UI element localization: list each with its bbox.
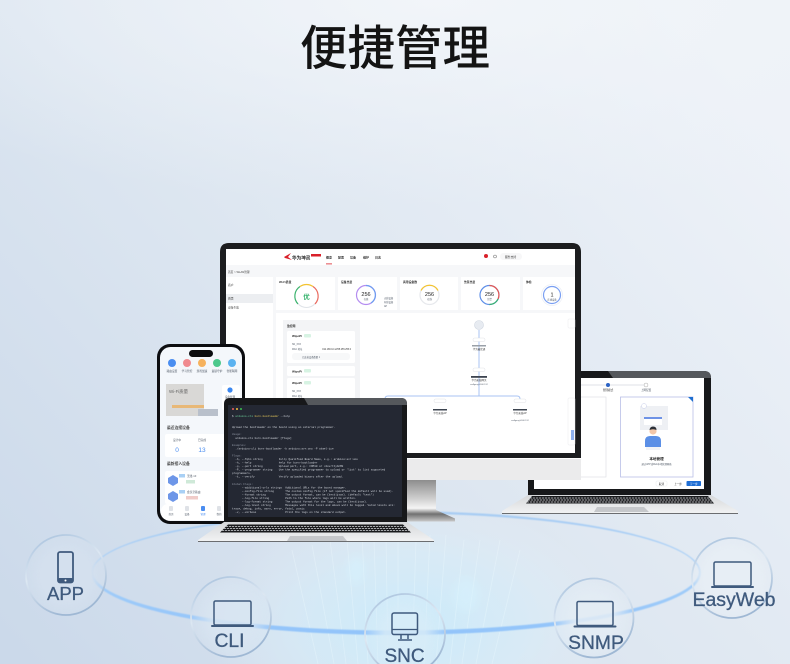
sidebar: 首页 xyxy=(228,296,234,300)
phone app icons: 游戏加速 xyxy=(197,369,208,373)
phone app icons: 学习管控 xyxy=(182,369,193,373)
phone tab bar: 我的 xyxy=(216,512,222,516)
screen xyxy=(534,378,704,489)
status card: access devices: 256 xyxy=(361,292,371,298)
device list xyxy=(283,320,360,453)
icon: smartphone xyxy=(58,552,73,583)
device list: 监控网 xyxy=(287,324,296,328)
status card: access devices: AP xyxy=(384,305,388,308)
phone device rows: 会议室路由 xyxy=(187,490,201,494)
selected option card: 通过APP或Web本地管理网络 xyxy=(642,462,672,466)
device card 3: SN_XXX xyxy=(292,391,302,393)
orbit ring xyxy=(91,511,701,635)
terminal screen: -P, --programmer string Use the specified programmer to upload or 'list' to list supported xyxy=(232,468,386,472)
phone stats card: 0 xyxy=(175,447,179,454)
lid xyxy=(528,371,711,495)
status card: access devices: 无线设备 xyxy=(384,296,394,300)
header bar: 配置 xyxy=(338,254,344,260)
base xyxy=(198,522,434,541)
phone tab bar xyxy=(161,504,241,520)
screen xyxy=(226,249,575,453)
status card: terminals: 商用设备数 xyxy=(403,280,417,284)
node: SNMP: SNMP xyxy=(568,633,624,654)
stepper: 管理模式 xyxy=(603,388,614,392)
status card: gateways: 告警 xyxy=(487,297,492,301)
phone device rows xyxy=(165,471,225,504)
status card: terminals: 在线 xyxy=(427,297,432,301)
left option card xyxy=(560,397,606,477)
terminal screen: -b, --fqbn string Fully Qualified Board Name, e.g.: arduino:avr:uno xyxy=(232,457,358,461)
terminal screen: Global Flags: xyxy=(232,482,253,486)
phone stats card: 已完成 xyxy=(198,438,206,442)
terminal screen: -p, --port string Upload port, e.g.: COM10 or /dev/ttyACM0 xyxy=(232,464,344,468)
selected option card: 本地管理 xyxy=(649,456,664,461)
terminal screen: arduino-cli burn-bootloader [flags] xyxy=(232,436,292,440)
person illustration xyxy=(645,426,661,450)
footer buttons: 取消 xyxy=(659,482,664,486)
node: EasyWeb: EasyWeb xyxy=(692,589,776,611)
terminal screen: --config-file string The custom config file (if not specified the default will be used). xyxy=(232,489,393,493)
node: SNMP xyxy=(554,578,634,658)
node: CLI xyxy=(191,577,271,657)
header bar: 概览 xyxy=(326,254,332,260)
phone tab bar: 设备 xyxy=(184,512,190,516)
breadcrumb: 首页 > WLAN管理 xyxy=(228,270,250,274)
terminal screen: -t, --verify Verify uploaded binary after the upload. xyxy=(232,474,343,478)
terminal screen: Flags: xyxy=(232,454,242,458)
terminal screen: Upload the bootloader on the board using an external programmer. xyxy=(232,425,335,429)
topology diagram: wolfgang14:80 192 xyxy=(470,384,489,386)
icon: desktop monitor xyxy=(392,613,418,640)
terminal screen: -h, --help help for burn-bootloader xyxy=(232,460,318,464)
icon: laptop xyxy=(711,562,754,588)
status card: gateways: 告警总量 xyxy=(464,280,475,284)
phone app icons: 路由设置 xyxy=(167,369,178,373)
status card: sites xyxy=(523,277,575,310)
topology diagram: 华为最优通 xyxy=(473,347,486,351)
terminal screen xyxy=(228,405,402,517)
topology diagram: wolfgang14:80 192 xyxy=(511,420,530,422)
phone stats card: 13 xyxy=(198,447,206,454)
light glow with rays xyxy=(200,495,620,664)
node: APP xyxy=(26,535,106,615)
phone device rows: 无线-1F xyxy=(187,474,197,478)
device card 1: WipoPi xyxy=(292,334,302,338)
header bar: 日志 xyxy=(375,254,381,260)
base xyxy=(502,495,738,513)
left laptop xyxy=(198,398,434,542)
main content area xyxy=(276,313,575,453)
header bar: 维护 xyxy=(363,254,369,260)
status card: access devices: 设备总量 xyxy=(341,280,352,284)
node: SNC xyxy=(365,594,445,664)
phone app icons: 童锁守护 xyxy=(212,369,223,373)
terminal screen: --log-file string Path to the file where logs will be written. xyxy=(232,496,356,500)
status card: access devices: 在线 xyxy=(364,297,369,301)
status card: gateways: 256 xyxy=(485,292,494,298)
terminal screen: $ arduino-cli burn-bootloader --help xyxy=(232,414,290,418)
device card 1: SN_XXX xyxy=(292,344,302,346)
header bar: 设备 xyxy=(350,254,356,260)
sidebar xyxy=(226,277,273,453)
topology diagram: 华为无线网关 xyxy=(471,378,487,382)
phone tab bar: 首页 xyxy=(168,512,174,516)
selected option card xyxy=(620,397,693,477)
footer buttons: 上一步 xyxy=(674,482,682,486)
icon: laptop xyxy=(574,602,616,628)
terminal screen: Examples: xyxy=(232,443,247,447)
header bar: 服务支持 xyxy=(505,255,516,259)
title: 便捷管理 xyxy=(300,10,490,79)
icon: laptop xyxy=(211,601,254,627)
sidebar: 商户 xyxy=(228,283,234,287)
chin xyxy=(220,458,581,480)
phone Wi-Fi banner xyxy=(166,384,218,416)
device card 2: WipoPi xyxy=(292,370,302,374)
terminal screen: --log-level string Messages with this level and above will be logged. Valid levels are: xyxy=(232,503,395,507)
terminal screen: --additional-urls strings Additional URLs for the board manager. xyxy=(232,486,347,490)
status card: gateways xyxy=(461,277,520,310)
footer buttons xyxy=(656,481,701,486)
stand xyxy=(407,480,455,522)
status card: terminals xyxy=(400,277,458,310)
topology diagram: 华为无线AP xyxy=(433,411,447,415)
terminal screen: programmers. xyxy=(232,472,251,475)
device card 3 xyxy=(287,378,355,410)
device card 1: MAC 地址 xyxy=(292,347,303,351)
status card: Wi-Fi quality: Wi-Fi质量 xyxy=(279,280,292,284)
right laptop xyxy=(502,371,738,514)
stepper: 上网配置 xyxy=(641,388,652,392)
phone stats card xyxy=(165,434,225,457)
status card: terminals: 256 xyxy=(425,292,434,298)
terminal screen: trace, debug, info, warn, error, fatal, panic xyxy=(232,506,305,510)
device card 3: WipoPi xyxy=(292,381,302,385)
status card: sites: 体检 xyxy=(526,280,532,284)
device card 1 xyxy=(287,331,355,363)
terminal screen: ./arduino-cli burn-bootloader -b arduino:avr:uno -P atmel-ice xyxy=(232,446,334,450)
header bar xyxy=(226,249,575,265)
phone tab bar: 管理 xyxy=(200,512,206,516)
terminal screen: --format string The output format, can be {text|json}. (default "text") xyxy=(232,492,374,496)
topology diagram: 华为无线AP xyxy=(513,411,527,415)
node: EasyWeb xyxy=(692,538,776,618)
header bar: 华为坤灵 xyxy=(292,254,311,262)
device card 3: MAC 地址 xyxy=(292,394,303,398)
frame xyxy=(220,243,581,458)
terminal screen: --log-format string The output format for the logs, can be {text|json}. xyxy=(232,500,367,504)
stepper xyxy=(575,383,652,392)
phone stats card: 设计中 xyxy=(173,438,181,442)
status card: sites: 在线设备 xyxy=(547,298,557,302)
sidebar: 设备列表 xyxy=(228,306,239,310)
terminal screen: Usage: xyxy=(232,433,242,436)
device card 1: 192.168.10.1/255.255.255.0 xyxy=(322,349,352,351)
terminal screen: -v, --verbose Print the logs on the standard output. xyxy=(232,510,347,514)
device card 1: 已连接设备数量 1 xyxy=(302,355,321,359)
status card: Wi-Fi quality: 优 xyxy=(303,292,310,301)
phone section heading 2: 最新接入设备 xyxy=(167,461,190,466)
topology diagram xyxy=(385,319,575,445)
monitor xyxy=(220,243,581,522)
phone xyxy=(157,344,245,524)
lid xyxy=(224,398,407,522)
status card: sites: 1 xyxy=(550,292,554,298)
footer buttons: 下一步 xyxy=(690,482,698,486)
phone app icons xyxy=(167,359,238,373)
status card: Wi-Fi quality xyxy=(276,277,335,310)
phone side card xyxy=(222,385,240,410)
phone app icons: 智能联网 xyxy=(227,369,238,373)
phone Wi-Fi banner: Wi-Fi质量 xyxy=(169,388,189,395)
status card: access devices xyxy=(338,277,397,310)
node: CLI: CLI xyxy=(214,631,245,652)
phone side card: 设备管理 xyxy=(225,395,236,399)
status card: access devices: 有线设备 xyxy=(384,300,394,304)
node: APP: APP xyxy=(47,583,84,604)
phone section heading 1: 最近连接设备 xyxy=(167,425,190,430)
